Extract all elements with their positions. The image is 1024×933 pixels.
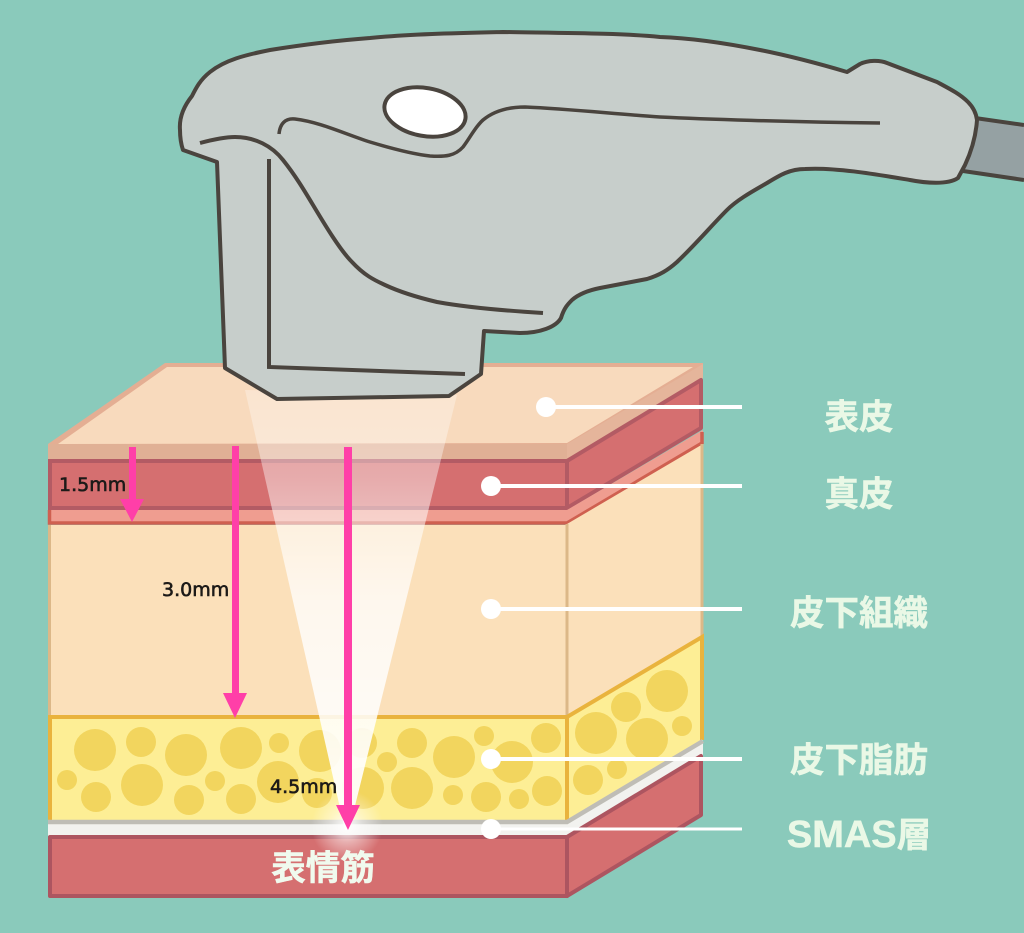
arrow: 3.0mm: [223, 446, 247, 718]
layer: dermis: [48, 380, 703, 524]
leader: subcutaneous tissue: [481, 599, 742, 619]
leader: dermis: [481, 476, 742, 496]
focal glow: [311, 790, 383, 862]
skin block: [48, 363, 703, 896]
handpiece: [180, 32, 1024, 399]
label: epidermis: 表皮: [824, 399, 894, 437]
leader: epidermis: [536, 397, 742, 417]
depth label 4.5mm: 4.5mm: [270, 776, 337, 798]
muscle label: 表情筋: [271, 850, 375, 888]
layer: facial muscle: [50, 756, 701, 896]
button: [380, 81, 470, 143]
ultrasound beam: [245, 390, 457, 830]
arrow: 4.5mm: [336, 447, 360, 830]
cable: [963, 118, 1024, 180]
depth label 1.5mm: 1.5mm: [59, 474, 126, 496]
handpiece contour lines: [200, 137, 543, 313]
layer: subcutaneous fat: [50, 637, 702, 821]
layer: subcutaneous tissue: [48, 444, 703, 718]
arrow: 1.5mm: [120, 447, 144, 522]
leader: SMAS: [481, 819, 742, 839]
leader: fat: [481, 749, 742, 769]
depth label 3.0mm: 3.0mm: [162, 579, 229, 601]
label: dermis: 真皮: [824, 476, 894, 514]
label: SMAS layer: SMAS層: [787, 814, 931, 856]
layer: SMAS: [48, 740, 703, 836]
layer: epidermis: [48, 363, 703, 459]
handpiece body: [180, 32, 977, 399]
label: subcutaneous fat: 皮下脂肪: [790, 742, 928, 780]
label: subcutaneous tissue: 皮下組織: [790, 595, 928, 633]
